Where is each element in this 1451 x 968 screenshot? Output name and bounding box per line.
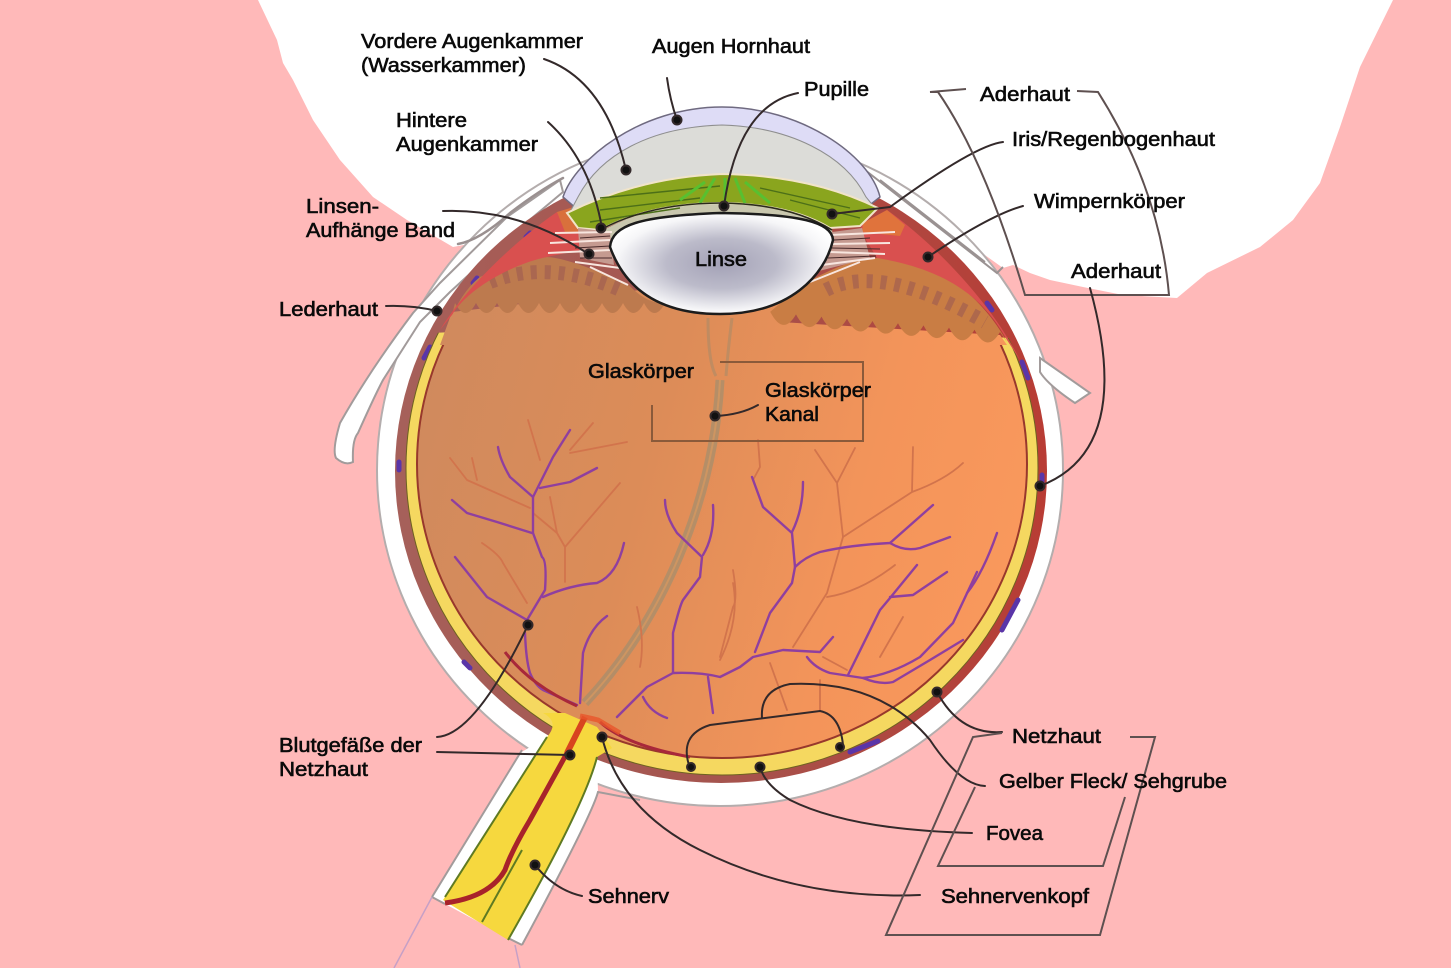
label: Hintere: Hintere [396, 110, 467, 132]
label: Netzhaut left: Netzhaut [279, 759, 368, 781]
optic nerve [394, 713, 640, 968]
leader: Gelber Fleck [687, 684, 985, 786]
leader: Aderhaut lower [1036, 288, 1104, 490]
leader: Lederhaut [386, 306, 442, 316]
label: Lederhaut: Lederhaut [279, 299, 378, 321]
cornea [563, 107, 880, 210]
leader: Augen Hornhaut [667, 78, 682, 124]
leader: Sehnervenkopf [598, 732, 920, 895]
bracket: Gelber Fleck inner [938, 787, 1125, 866]
eye muscle right [1040, 358, 1090, 403]
iris fibres [590, 186, 860, 222]
vitreous body [416, 345, 1028, 759]
lower-left vitreous red edge [505, 652, 690, 757]
label: Augen Hornhaut: Augen Hornhaut [652, 36, 810, 58]
ciliary band left [452, 257, 665, 315]
disc glow [580, 716, 620, 733]
label: Wimpernkörper: Wimpernkörper [1034, 191, 1185, 213]
label: Vordere Augenkammer: Vordere Augenkammer [361, 31, 583, 53]
label: Kanal: Kanal [765, 404, 819, 426]
leader: Fovea [756, 762, 972, 833]
nerve lines [445, 737, 597, 940]
leader: Sehnerv [530, 860, 582, 896]
leader: Wimpernkörper [924, 206, 1023, 262]
label: Gelber Fleck / Sehgrube: Gelber Fleck/ Sehgrube [999, 771, 1227, 793]
label: Aderhaut lower: Aderhaut [1071, 261, 1161, 283]
ciliary band right [770, 258, 1007, 342]
vitreous canal [708, 318, 732, 376]
sclera [377, 134, 1063, 806]
nerve sheath [432, 737, 598, 945]
choroid [395, 159, 1047, 783]
leader: Blutgefäße upper [437, 620, 532, 737]
leader: Hintere Augenkammer [548, 122, 606, 232]
bracket: Aderhaut [930, 89, 1169, 295]
label: Sehnerv: Sehnerv [588, 886, 669, 908]
thin pale lines [394, 897, 520, 968]
choroid purple spots [399, 233, 1042, 752]
ciliary band stripes [490, 272, 985, 322]
label: Linsen-: Linsen- [306, 196, 379, 218]
upper right muscle lines [865, 170, 1003, 273]
gap beneath iris [600, 203, 835, 245]
label: Sehnervenkopf: Sehnervenkopf [941, 886, 1089, 908]
leader: Iris [828, 142, 1003, 218]
ciliary body right [860, 210, 1020, 360]
label: Glaskörper: Glaskörper [588, 361, 694, 383]
sheath outlines [432, 750, 640, 945]
label: Iris/Regenbogenhaut: Iris/Regenbogenhaut [1012, 129, 1215, 151]
label: Netzhaut right: Netzhaut [1012, 726, 1101, 748]
ciliary body left [440, 212, 590, 330]
label: Blutgefäße der: Blutgefäße der [279, 735, 422, 757]
label: Pupille: Pupille [804, 79, 869, 101]
label: Fovea: Fovea [986, 823, 1044, 845]
zonule fibres [548, 228, 895, 285]
bracket: Glaskörper Kanal [652, 362, 863, 441]
leader: Linsen-Aufhänge Band [443, 211, 594, 258]
anterior chamber [570, 125, 875, 212]
leader: Netzhaut [932, 688, 1002, 732]
label: Glaskörper Kanal line 1: Glaskörper [765, 380, 871, 402]
retina [406, 332, 1038, 776]
retinal vessels orange [450, 420, 963, 710]
white upper background shape [258, 0, 1393, 298]
upper left wavy muscle line [458, 178, 563, 244]
label: Augenkammer: Augenkammer [396, 134, 538, 156]
nerve body [443, 713, 612, 940]
label: Aufhänge Band: Aufhänge Band [306, 220, 455, 242]
lens [610, 213, 833, 314]
label: Wasserkammer: (Wasserkammer) [361, 55, 526, 77]
bracket: Netzhaut outer [886, 733, 1155, 935]
label: Aderhaut top: Aderhaut [980, 84, 1070, 106]
central vessel [445, 753, 567, 903]
leader: Vordere Augenkammer [544, 59, 630, 174]
eye muscle left [335, 180, 563, 463]
leader: Pupille [720, 93, 798, 210]
leader: Blutgefäße lower [437, 750, 574, 760]
vitreous upper fill [440, 290, 1007, 345]
retinal vessels purple [452, 430, 997, 718]
label: Linse: Linse [695, 249, 747, 271]
leader: Glaskörper Kanal [710, 405, 758, 420]
eyeball [335, 107, 1090, 968]
iris [567, 174, 878, 230]
